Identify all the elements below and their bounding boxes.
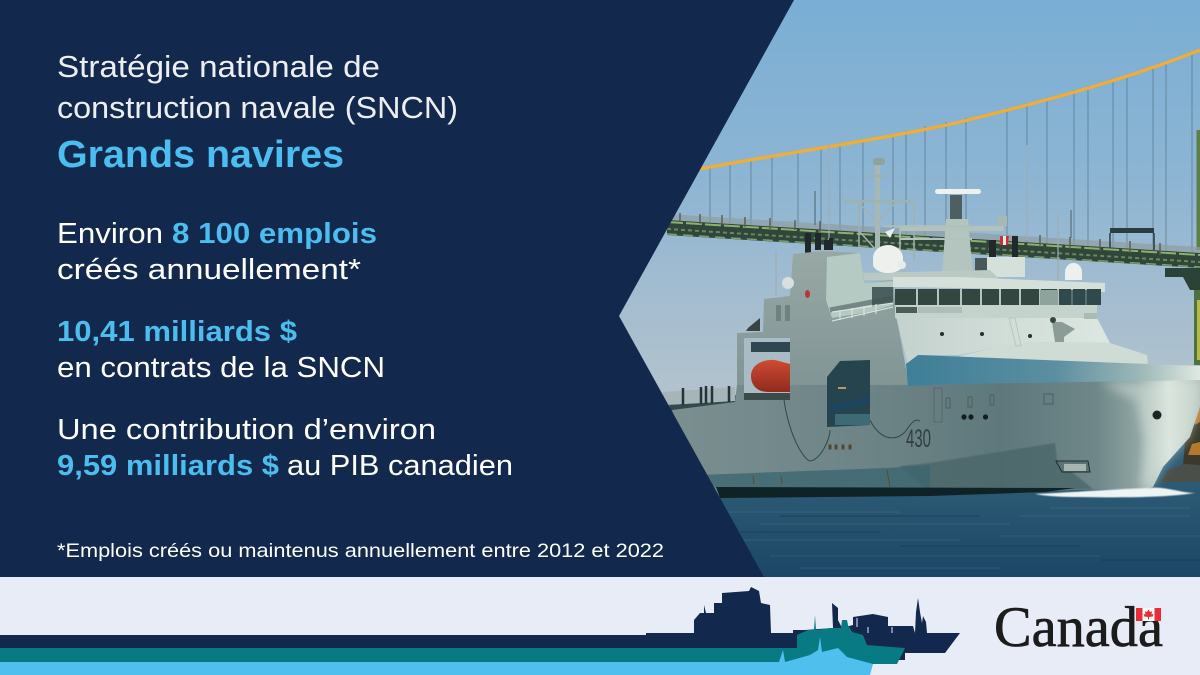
hull xyxy=(672,355,1200,498)
bridge windows xyxy=(893,277,1105,319)
foredeck gun and ladder xyxy=(940,317,1075,346)
stat: GDP contribution: Une contribution d’environ xyxy=(57,414,436,446)
lifeboat opening xyxy=(744,338,790,400)
stat: jobs: créés annuellement* xyxy=(57,254,361,286)
photo: ship under bridge xyxy=(600,0,1200,577)
stat: contracts: 10,41 milliards $ xyxy=(57,316,297,348)
bow wake xyxy=(1035,488,1195,497)
Canadian flag on ship xyxy=(1000,236,1009,245)
stat: GDP contribution: 9,59 milliards $ xyxy=(57,450,279,482)
boat bay opening xyxy=(827,360,870,427)
sky xyxy=(600,0,1200,400)
ship mast and antennas xyxy=(776,140,1058,295)
superstructure xyxy=(737,251,1148,390)
water xyxy=(600,395,1200,577)
bridge tower xyxy=(1165,130,1200,365)
title: Stratégie nationale de xyxy=(57,49,380,84)
stat: jobs: 8 100 emplois xyxy=(172,218,377,250)
ship silhouette: navy xyxy=(0,587,960,660)
ship silhouette: light blue xyxy=(0,637,873,675)
panel: navy text background xyxy=(0,0,794,577)
upper deck block xyxy=(863,257,1025,280)
stat: jobs: Environ xyxy=(57,218,163,250)
aft deck railing and crew xyxy=(663,386,735,411)
footnote: *Emplois créés ou maintenus annuellement entre 2012 et 2022 xyxy=(57,540,664,562)
orange main cable xyxy=(700,50,1200,169)
stat: jobs xyxy=(57,218,377,286)
stat: GDP contribution xyxy=(57,414,513,482)
footer band xyxy=(0,577,1200,675)
stat: contracts: en contrats de la SNCN xyxy=(57,352,385,384)
suspension hangers xyxy=(710,52,1192,256)
hull number 430: 430 xyxy=(906,425,931,453)
funnels xyxy=(805,233,1018,258)
heading: Grands navires: Grands navires xyxy=(57,134,344,176)
Canadian flag symbol xyxy=(1136,608,1161,621)
radar domes xyxy=(873,245,1082,280)
title xyxy=(57,49,458,125)
stat: GDP contribution: au PIB canadien xyxy=(287,450,513,482)
Canada wordmark: Canada xyxy=(994,596,1163,659)
bridge deck xyxy=(667,191,1200,268)
stat: contracts xyxy=(57,316,385,384)
title: construction navale (SNCN) xyxy=(57,90,458,125)
ship silhouette: teal xyxy=(0,615,905,664)
shore rocks xyxy=(1160,405,1200,482)
